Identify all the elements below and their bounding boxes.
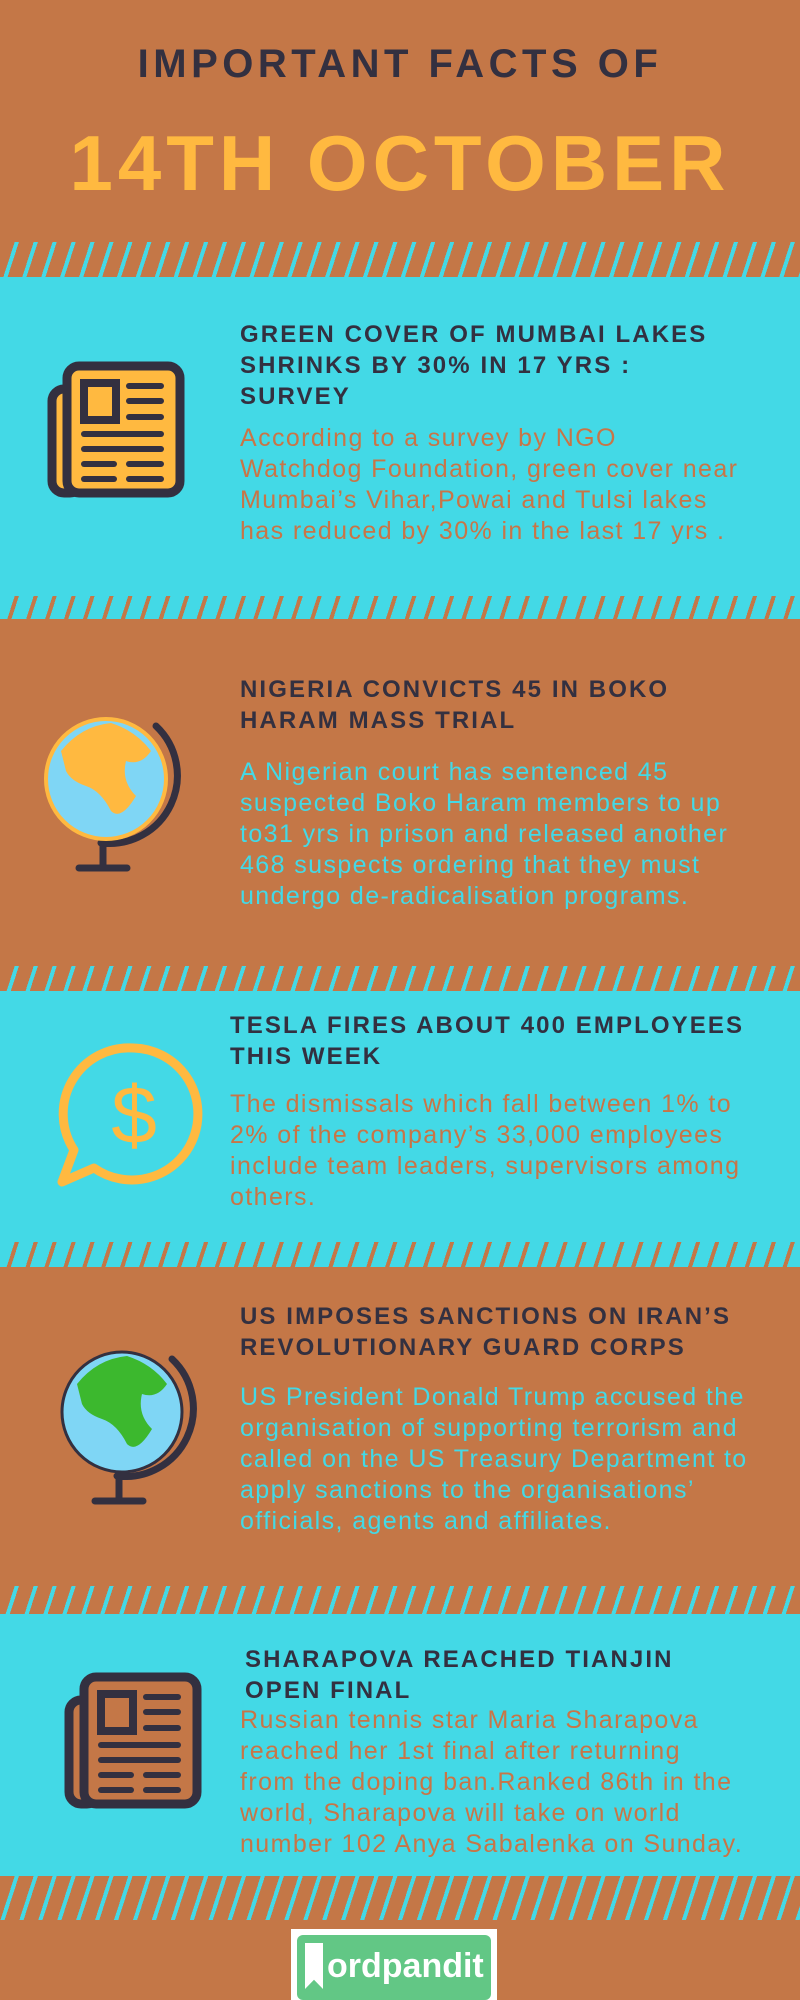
body text: suspected Boko Haram members to up (240, 789, 721, 817)
panel: green cover (0, 277, 800, 596)
body text: from the doping ban.Ranked 86th in the (240, 1768, 732, 1796)
body text (240, 1383, 748, 1535)
heading: US IMPOSES SANCTIONS ON IRAN’S (240, 1303, 731, 1330)
body text: others. (230, 1183, 316, 1211)
icon: dollar speech bubble: $ (111, 1070, 157, 1161)
body text: has reduced by 30% in the last 17 yrs . (240, 517, 725, 545)
heading (240, 676, 669, 734)
heading (240, 321, 707, 410)
body text: undergo de-radicalisation programs. (240, 882, 689, 910)
body text: apply sanctions to the organisations’ (240, 1476, 695, 1504)
icon: globe green (60, 1350, 197, 1504)
body text (230, 1090, 740, 1211)
body text: US President Donald Trump accused the (240, 1383, 745, 1411)
body text: officials, agents and affiliates. (240, 1507, 612, 1535)
heading (230, 1012, 744, 1070)
body text: 2% of the company’s 33,000 employees (230, 1121, 723, 1149)
heading: OPEN FINAL (245, 1677, 411, 1704)
body text: 468 suspects ordering that they must (240, 851, 700, 879)
body text: Watchdog Foundation, green cover near (240, 455, 738, 483)
icon: globe yellow (44, 717, 181, 872)
body text: A Nigerian court has sentenced 45 (240, 758, 668, 786)
body text: number 102 Anya Sabalenka on Sunday. (240, 1830, 743, 1858)
heading: NIGERIA CONVICTS 45 IN BOKO (240, 676, 669, 703)
body text: organisation of supporting terrorism and (240, 1414, 738, 1442)
body text: to31 yrs in prison and released another (240, 820, 728, 848)
body text: According to a survey by NGO (240, 424, 617, 452)
title: IMPORTANT FACTS OF (138, 42, 662, 86)
heading: SHRINKS BY 30% IN 17 YRS : (240, 352, 631, 379)
body text: called on the US Treasury Department to (240, 1445, 748, 1473)
main date title: 14TH OCTOBER (70, 119, 730, 207)
heading: TESLA FIRES ABOUT 400 EMPLOYEES (230, 1012, 744, 1039)
icon: newspaper (48, 362, 184, 498)
body text: world, Sharapova will take on world (240, 1799, 681, 1827)
panel: Nigeria (0, 619, 800, 966)
panel: Tesla (0, 991, 800, 1242)
logo (291, 1929, 497, 2000)
icon: dollar speech bubble (58, 1043, 202, 1186)
logo: ordpandit (327, 1947, 484, 1985)
header background (0, 0, 800, 242)
heading (240, 1303, 731, 1361)
heading: SHARAPOVA REACHED TIANJIN (245, 1646, 674, 1673)
body text: Mumbai’s Vihar,Powai and Tulsi lakes (240, 486, 708, 514)
heading: GREEN COVER OF MUMBAI LAKES (240, 321, 707, 348)
heading: REVOLUTIONARY GUARD CORPS (240, 1334, 686, 1361)
icon: newspaper brown (64, 1672, 202, 1808)
body text (240, 424, 738, 545)
heading: HARAM MASS TRIAL (240, 707, 516, 734)
body text: reached her 1st final after returning (240, 1737, 681, 1765)
heading (245, 1646, 674, 1704)
heading: SURVEY (240, 383, 351, 410)
body text (240, 758, 728, 910)
body text: Russian tennis star Maria Sharapova (240, 1706, 699, 1734)
body text: The dismissals which fall between 1% to (230, 1090, 732, 1118)
body text (240, 1706, 743, 1858)
panel: US sanctions (0, 1267, 800, 1586)
body text: include team leaders, supervisors among (230, 1152, 740, 1180)
panel: Sharapova (0, 1614, 800, 1876)
heading: THIS WEEK (230, 1043, 382, 1070)
